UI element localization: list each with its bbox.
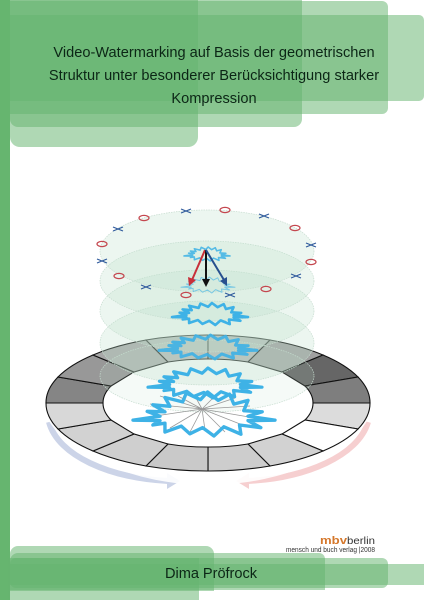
blue cross markers [97,209,316,297]
translucent stacked discs [100,210,314,412]
title: Video-Watermarking auf Basis der geometrischen [53,45,375,61]
diagram: pale rotation arrows [49,422,368,489]
publisher logo: mensch und buch verlag |2008 [286,547,375,554]
arrow: red [188,250,205,286]
title [49,45,379,107]
publisher logo: mbv [320,535,348,547]
arrow: blue rotation [49,422,180,489]
bottom star spokes [150,396,255,432]
arrow: blue [206,250,227,286]
star: second disc [181,277,235,293]
disc stars [159,247,257,359]
star: third disc [172,303,248,325]
top green overlapping panels [10,0,424,147]
publisher logo: berlin [347,536,375,547]
red circle markers [97,207,316,298]
vector arrows [188,250,227,287]
publisher logo [286,535,375,554]
bottom green overlapping panels [8,546,424,600]
title: Struktur unter besonderer Berücksichtigung starker [49,68,379,84]
bottom star [133,392,275,436]
arrow: red rotation [236,422,368,489]
author name: Dima Pröfrock [165,566,258,582]
left green strip [0,0,10,600]
segmented ring [46,335,370,471]
second star [148,368,262,398]
star: ring level [159,335,257,359]
arrow: black [202,250,210,287]
star: top disc [184,247,230,261]
title: Kompression [171,91,257,107]
ring base shadow [46,403,370,485]
